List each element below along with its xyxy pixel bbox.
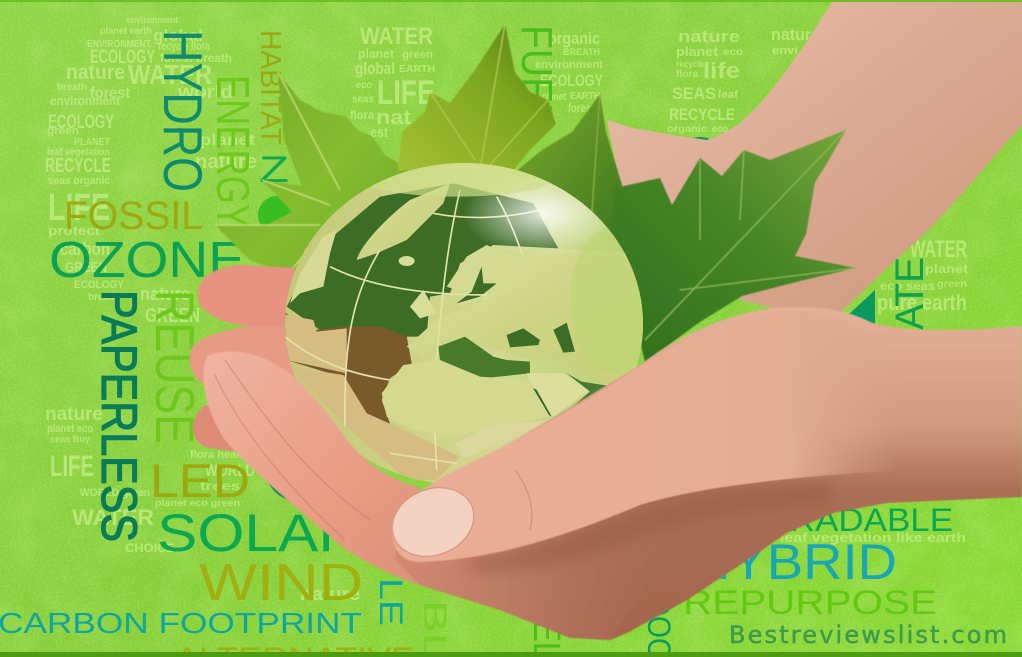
upper hand — [607, 2, 1022, 315]
faint word cloud: top left: planet earth — [100, 26, 152, 37]
faint word cloud: right: pure earth — [877, 290, 967, 315]
faint word cloud: top left: RECYCLE — [45, 155, 111, 177]
faint word cloud: right: planet — [925, 262, 968, 276]
faint word cloud: top middle: green — [402, 49, 433, 61]
faint word cloud: top left — [45, 15, 257, 327]
faint word cloud: lower left: LIFE — [50, 450, 94, 483]
faint word cloud: top middle — [350, 23, 603, 140]
globe: Iceland — [399, 256, 415, 266]
faint word cloud: top right: eco — [712, 124, 728, 135]
word fragment: green circle — [258, 196, 296, 234]
faint word cloud: top middle: EARTH — [570, 91, 600, 102]
globe: Black Sea — [507, 328, 540, 347]
faint word cloud: lower left: planet eco — [47, 423, 93, 435]
faint word cloud: top left: breath — [88, 292, 118, 303]
hand: skin creases — [215, 360, 532, 540]
faint word cloud: top middle: ECOLOGY — [540, 71, 603, 90]
faint word cloud: top left: LIFE — [48, 187, 110, 229]
leaf: large right — [610, 130, 856, 362]
faint word cloud: top right: eco — [723, 47, 743, 58]
globe — [280, 157, 657, 490]
faint word cloud: lower left: seas Buy — [50, 434, 90, 444]
word fragment: teal block — [848, 290, 875, 326]
faint word cloud: top right: leaf — [718, 89, 738, 101]
faint word cloud: top left: green — [47, 125, 79, 137]
hand: thumb — [392, 310, 900, 562]
leaf: left — [215, 72, 410, 306]
globe: Arabia — [527, 373, 590, 417]
word: OZONE: OZONE — [49, 231, 245, 288]
faint word cloud: lower left: trees — [200, 479, 240, 493]
faint word cloud: top right: organic — [667, 124, 707, 135]
faint word cloud: top left: world — [177, 82, 233, 102]
faint word cloud: right: eco seas — [880, 279, 935, 293]
faint word cloud: top middle: est — [370, 124, 388, 140]
faint word cloud: top left: breath — [57, 82, 87, 93]
faint word cloud: top middle: WATER — [360, 23, 433, 50]
faint word cloud: lower left: CHOICE — [125, 541, 175, 555]
faint word cloud: top left: global — [153, 26, 203, 45]
word: REUSE: REUSE — [144, 290, 206, 444]
faint word cloud: top right — [667, 25, 811, 135]
hand: thumb nail — [382, 476, 484, 568]
word fragment: Z: Z — [259, 149, 289, 190]
faint word cloud: top middle: planet — [542, 91, 566, 103]
faint word cloud: top left: carbon — [60, 239, 110, 259]
word: LE vertical: LE — [373, 578, 409, 626]
word: BIODEGRADABLE: BIODEGRADABLE — [654, 502, 953, 538]
word: HYBRID: HYBRID — [691, 534, 897, 590]
word: SOLAR: SOLAR — [157, 504, 362, 563]
faint word cloud: top right: recycle — [676, 59, 704, 69]
globe base glass — [280, 160, 650, 490]
faint word cloud: top right: flora — [676, 69, 698, 80]
faint word cloud: top left: PLANET — [74, 137, 110, 148]
faint word cloud: lower left: WORLD green — [80, 487, 150, 499]
faint word cloud: lower right: leaf vegetation like earth — [780, 530, 966, 545]
word: HYDRO: HYDRO — [152, 30, 214, 192]
globe: Mediterranean — [438, 337, 530, 378]
faint word cloud: lower left — [45, 404, 360, 604]
faint word cloud: top middle: nat — [376, 107, 411, 129]
faint word cloud: top middle: eco — [356, 80, 372, 91]
word: PAPERLESS: PAPERLESS — [91, 290, 147, 542]
faint word cloud: right: green — [937, 279, 967, 290]
hand: thumb shadow — [470, 482, 830, 572]
globe: Europe and Asia — [407, 248, 650, 390]
faint word cloud: lower left: nature — [45, 404, 103, 425]
faint word cloud: top right: life — [703, 58, 740, 83]
faint word cloud: top right: RECYCLE — [669, 105, 735, 124]
word: FOSSIL: FOSSIL — [64, 194, 203, 238]
faint word cloud: top left: nature — [140, 284, 190, 304]
faint word cloud: lower left: planet eco green — [155, 498, 240, 508]
faint word cloud: top left: nature — [66, 61, 125, 84]
faint word cloud: lower left: flora health — [190, 449, 250, 461]
faint word cloud: top right: natur — [771, 25, 811, 44]
faint word cloud: top left: protect — [48, 223, 101, 238]
faint word cloud: top left: environment — [50, 93, 121, 108]
word: HABITAT: HABITAT — [254, 30, 286, 145]
faint word cloud: top right: SEAS — [672, 84, 716, 103]
word: WATER vertical: ATE — [888, 257, 932, 330]
globe: dark sea — [287, 183, 558, 380]
faint word cloud: right: WATER — [910, 236, 967, 263]
faint word cloud: top middle: seas — [352, 94, 374, 105]
word: LED: LED — [150, 454, 250, 507]
globe: Caspian Sea — [553, 323, 575, 353]
word: CARBON FOOTPRINT: CARBON FOOTPRINT — [0, 608, 362, 640]
word: WIND: WIND — [199, 554, 363, 612]
globe: brown reflection — [285, 313, 412, 424]
globe: Red Sea — [532, 388, 552, 416]
faint word cloud: top middle: LIFE — [377, 74, 435, 112]
faint word cloud: top middle: forest — [568, 101, 594, 115]
leaf: small dark — [515, 94, 650, 260]
faint word cloud: top left: ENVIRONMENT — [87, 39, 151, 50]
globe: North America — [290, 230, 337, 303]
word: renewable vertical: BL — [417, 600, 453, 657]
globe: British Isles — [410, 290, 437, 318]
faint word cloud: top middle: environment — [535, 59, 603, 71]
faint word cloud: top right: nature — [678, 27, 740, 46]
faint word cloud: top left: planet — [200, 132, 256, 149]
faint word cloud: lower left: WATER — [72, 505, 154, 530]
faint word cloud: top right: envi — [772, 45, 798, 57]
globe: meridians and parallels — [285, 190, 540, 470]
faint word cloud: top left: forest — [90, 85, 131, 102]
faint word cloud: top left: WATER — [128, 59, 212, 90]
faint word cloud: top middle: organic — [548, 29, 600, 48]
globe: Greenland — [357, 183, 450, 260]
faint word cloud: top left: leaf vegetation — [47, 147, 110, 158]
globe: Baltic — [457, 267, 497, 303]
globe: lower land — [455, 420, 553, 458]
hand: back fingers — [190, 265, 295, 453]
faint word cloud: top left: GREEN — [145, 305, 200, 327]
watermark: Bestreviewslist.com: Bestreviewslist.com — [729, 621, 1007, 649]
bottom green bar — [0, 652, 1022, 657]
faint word cloud: top left: ECOLOGY — [90, 47, 155, 68]
globe: Arabian Sea — [566, 373, 607, 406]
faint word cloud: top middle: planet — [358, 46, 395, 61]
word fragment: teal sliver — [690, 137, 710, 143]
word: REPURPOSE: REPURPOSE — [683, 584, 937, 622]
leaf: top centre — [398, 24, 556, 172]
faint word cloud: top middle: BREATH — [563, 47, 600, 57]
faint word cloud: top middle: global — [355, 59, 395, 78]
faint word cloud: top left: nature — [195, 151, 257, 173]
faint word cloud: top right: planet — [676, 44, 719, 59]
faint word cloud: top left: forest breath — [160, 51, 232, 65]
globe: Scandinavia — [446, 245, 556, 288]
faint word cloud: top left: environment — [126, 15, 178, 25]
globe: Africa — [382, 360, 550, 437]
globe: top highlight — [467, 178, 607, 252]
faint word cloud: top middle: flora — [350, 108, 374, 122]
faint word cloud: lower left: WORLD — [205, 461, 255, 480]
faint word cloud: top left: ECOLOGY — [74, 279, 125, 291]
faint word cloud: lower left: nature — [300, 584, 360, 604]
word fragment: teal ring — [269, 442, 325, 498]
lower hand: palm and wrist silhouette — [350, 307, 1022, 640]
faint word cloud: top left: ECOLOGY — [48, 112, 114, 133]
faint word cloud: top middle: EARTH — [399, 64, 435, 75]
word: ENERGY: ENERGY — [207, 75, 259, 228]
faint word cloud: top left: recycle flora — [158, 39, 210, 53]
faint word cloud: top left: seas organic — [48, 175, 110, 187]
faint word cloud: top left: GREEN — [65, 259, 107, 276]
globe: tan finger reflection — [280, 313, 460, 480]
faint word cloud: right — [877, 236, 968, 315]
word: FUEL: FUEL — [512, 25, 561, 125]
hand: curled index finger — [204, 351, 420, 585]
